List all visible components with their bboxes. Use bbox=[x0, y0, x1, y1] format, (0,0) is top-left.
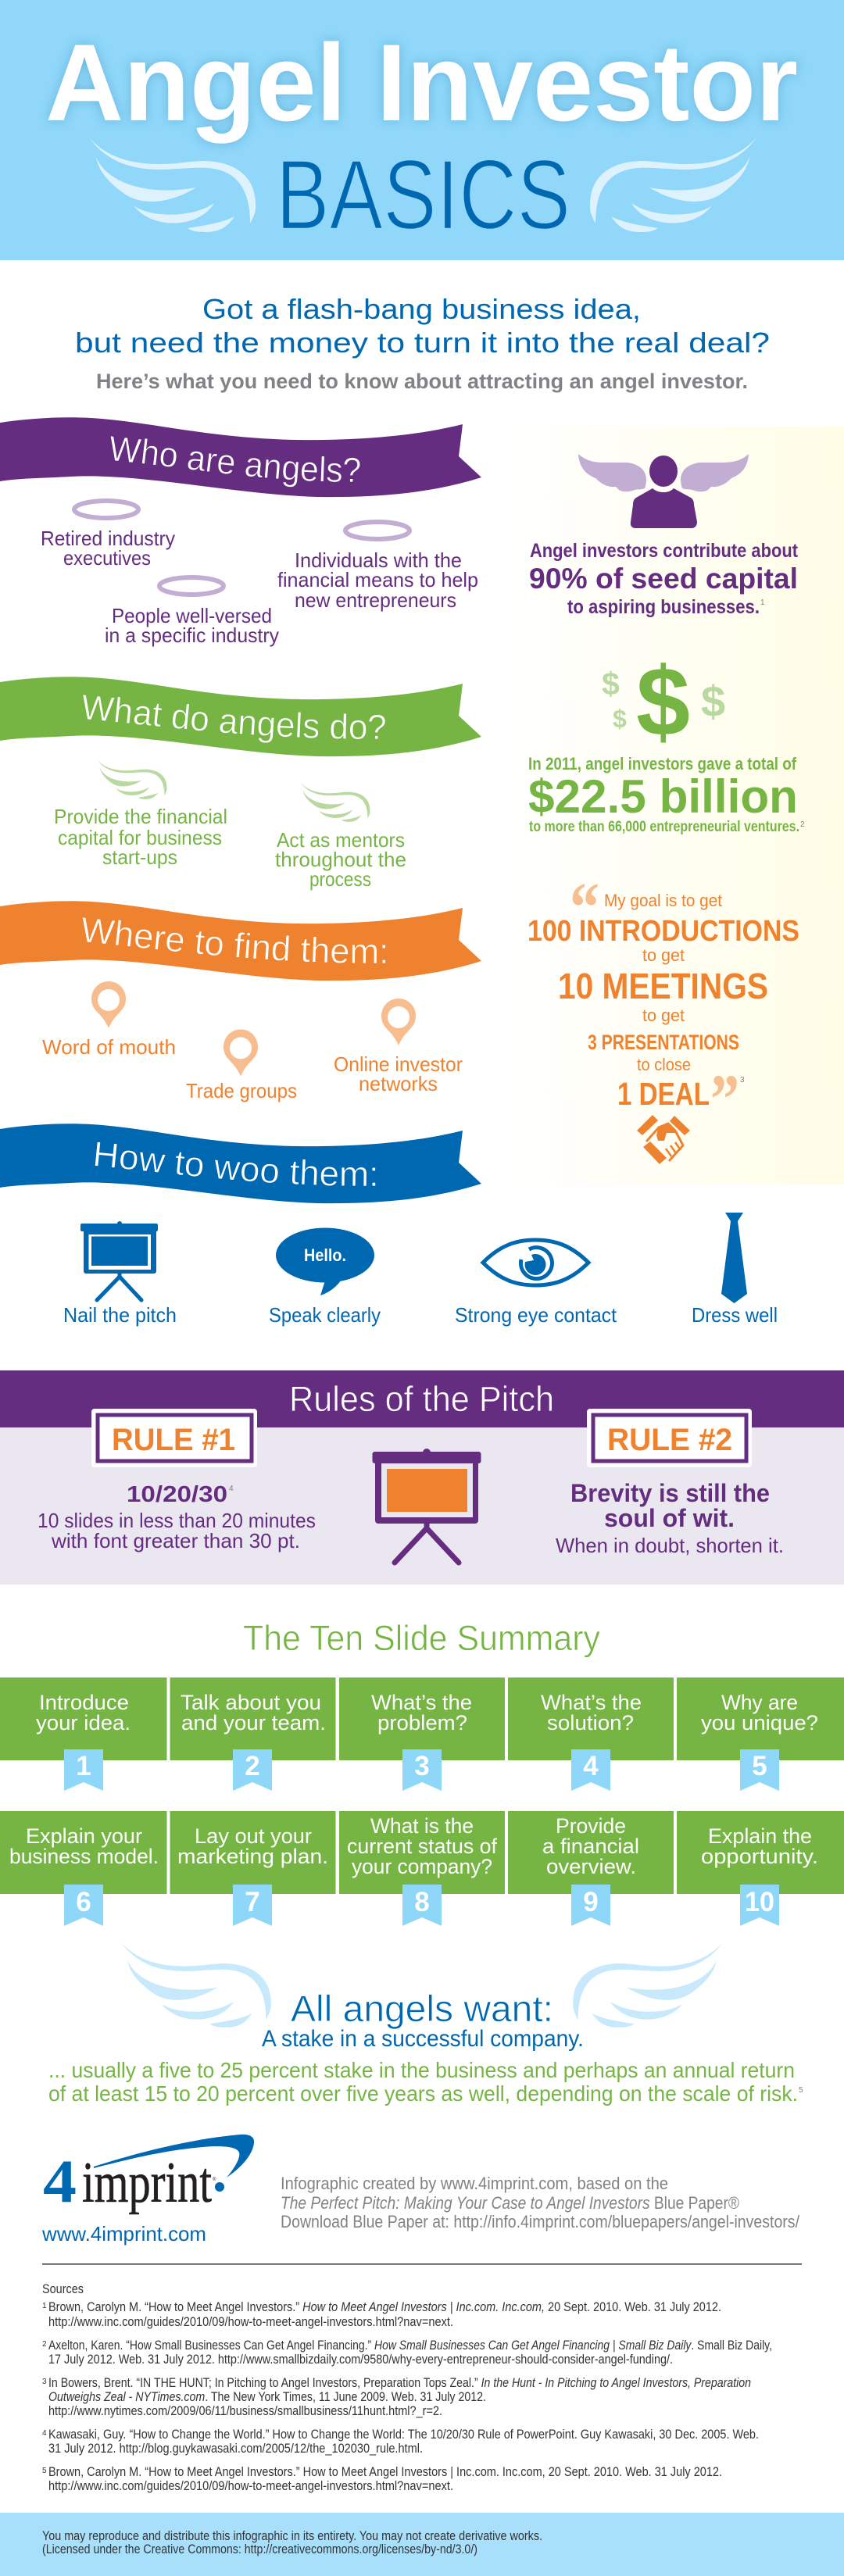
text: sources: Outweighs Zeal - NYTimes.com. The New York Times, 11 June 2009. Web. 31 July 2012. bbox=[48, 2390, 486, 2404]
stat: 22.5 billion: to more than 66,000 entrepreneurial ventures. bbox=[529, 819, 799, 835]
text: sources: In Bowers, Brent. “IN THE HUNT; In Pitching to Angel Investors, Preparation Tops Zeal.” In the Hunt - In Pitching to Angel Investors, Preparation bbox=[48, 2376, 751, 2390]
slide 9: 9 bbox=[583, 1887, 599, 1917]
text: stake details: ... usually a five to 25 percent stake in the business and perhaps an annual return bbox=[48, 2058, 795, 2082]
stat: 22.5 billion: 2 bbox=[800, 820, 805, 829]
slide 10: Explain the bbox=[708, 1824, 812, 1848]
panel: cream stats background bbox=[500, 427, 844, 1184]
slide 2: 2 bbox=[245, 1751, 260, 1781]
icon: pin 1 bbox=[91, 981, 126, 1028]
logo: 4imprint: 4 bbox=[43, 2147, 77, 2215]
logo: 4imprint: ® bbox=[213, 2177, 216, 2182]
text: sources: 4 bbox=[42, 2429, 47, 2438]
header band bbox=[0, 0, 844, 260]
slide 2: Talk about you bbox=[181, 1691, 321, 1714]
slide 4: 4 bbox=[583, 1751, 599, 1781]
stat: 22.5 billion bbox=[528, 754, 805, 835]
slide 4 bbox=[508, 1677, 674, 1791]
text: sources: Kawasaki, Guy. “How to Change the World.” How to Change the World: The 10/20/30 Rule of PowerPoint. Guy Kawasaki, 30 Dec. 2005. Web. bbox=[48, 2428, 759, 2442]
icon: angel figure bbox=[578, 454, 749, 528]
icon: wing 1 bbox=[97, 759, 166, 799]
icon: small easel bbox=[80, 1221, 158, 1300]
heading: who are angels: Who are angels? bbox=[111, 436, 359, 488]
heading: how to woo them: How to woo them: bbox=[95, 1142, 375, 1186]
quote: introductions to deal: to get bbox=[642, 945, 685, 965]
icon: right wing bbox=[573, 1942, 723, 2028]
text: credits: Infographic created by www.4imprint.com, based on the bbox=[281, 2174, 668, 2193]
quote: introductions to deal: to close bbox=[637, 1055, 691, 1074]
text: people well-versed: People well-versed bbox=[112, 604, 272, 627]
text: rule 2 details bbox=[556, 1479, 784, 1557]
text: strong eye contact: Strong eye contact bbox=[455, 1303, 617, 1327]
text: rule 2 details: soul of wit. bbox=[604, 1504, 735, 1532]
intro text block bbox=[75, 293, 770, 393]
title: Angel Investor: Angel Investor bbox=[45, 21, 798, 144]
icon: speech bubble bbox=[276, 1228, 374, 1295]
footer band: (Licensed under the Creative Commons: http://creativecommons.org/licenses/by-nd/3.0/) bbox=[42, 2542, 477, 2556]
slide 10 bbox=[677, 1811, 844, 1926]
stat: 90% of seed capital: 1 bbox=[760, 598, 765, 607]
heading: rules of the pitch: Rules of the Pitch bbox=[289, 1379, 554, 1419]
icon: left wing bbox=[121, 1942, 271, 2028]
text: credits: The Perfect Pitch: Making Your Case to Angel Investors Blue Paper® bbox=[281, 2193, 739, 2213]
text: retired executives bbox=[41, 527, 175, 570]
icon: large easel bbox=[372, 1449, 481, 1563]
text: individuals bbox=[277, 548, 478, 612]
text: sources: http://www.inc.com/guides/2010/09/how-to-meet-angel-investors.html?nav=next. bbox=[48, 2479, 453, 2493]
slide 8: current status of bbox=[347, 1835, 497, 1858]
text: website: www.4imprint.com bbox=[41, 2222, 206, 2246]
quote: introductions to deal: 1 DEAL bbox=[617, 1076, 710, 1112]
logo: 4imprint: imprint bbox=[82, 2151, 212, 2215]
quote: introductions to deal: to get bbox=[642, 1006, 685, 1025]
text: rule 2 details: When in doubt, shorten it. bbox=[556, 1534, 784, 1557]
panel: how to woo them bbox=[0, 1124, 778, 1327]
text: act as mentors: process bbox=[309, 867, 371, 891]
slide 9: Provide bbox=[556, 1814, 626, 1838]
slide 3: 3 bbox=[414, 1751, 430, 1781]
quote: introductions to deal: 3 bbox=[740, 1076, 745, 1084]
slide 8: your company? bbox=[352, 1855, 492, 1878]
ribbon: who are angels bbox=[0, 417, 481, 497]
icon: speech bubble: Hello. bbox=[304, 1245, 346, 1265]
text: dress well: Dress well bbox=[692, 1303, 778, 1327]
text: sources: 31 July 2012. http://blog.guykawasaki.com/2005/12/the_102030_rule.html. bbox=[48, 2442, 423, 2456]
icon: dollar signs bbox=[602, 648, 725, 756]
slide 6 bbox=[0, 1811, 167, 1926]
stat: 90% of seed capital: to aspiring businesses. bbox=[567, 596, 760, 618]
panel: slide summary grid bbox=[0, 1677, 844, 1926]
heading: the ten slide summary: The Ten Slide Summary bbox=[243, 1618, 600, 1658]
text: rule 1 details: 10 slides in less than 20 minutes bbox=[38, 1509, 316, 1532]
quote: introductions to deal bbox=[528, 869, 799, 1138]
quote: introductions to deal: 100 INTRODUCTIONS bbox=[528, 915, 799, 948]
footer band: You may reproduce and distribute this infographic in its entirety. You may not create derivative works. bbox=[42, 2529, 542, 2543]
icon: left wing bbox=[89, 138, 256, 232]
slide 1: Introduce bbox=[39, 1691, 129, 1714]
intro text block: but need the money to turn it into the real deal? bbox=[75, 327, 770, 359]
text: sources: http://www.nytimes.com/2009/06/11/business/smallbusiness/11hunt.html?_r=2. bbox=[48, 2404, 442, 2418]
slide 1 bbox=[0, 1677, 167, 1791]
stat: 22.5 billion: $22.5 billion bbox=[528, 770, 798, 823]
text: online investor networks: Online investor bbox=[334, 1052, 463, 1076]
slide 3 bbox=[339, 1677, 505, 1791]
slide 5 bbox=[677, 1677, 844, 1791]
slide 7: Lay out your bbox=[195, 1824, 312, 1848]
quote: introductions to deal: 3 PRESENTATIONS bbox=[588, 1031, 739, 1054]
text: sources: Sources bbox=[42, 2282, 84, 2296]
text: sources: Brown, Carolyn M. “How to Meet Angel Investors.” How to Meet Angel Investors | Inc.com. Inc.com, 20 Sept. 2010. Web. 31 July 2012. bbox=[48, 2300, 721, 2314]
slide 8: 8 bbox=[414, 1887, 430, 1917]
ribbon: what do angels do bbox=[0, 677, 481, 756]
slide 7: marketing plan. bbox=[177, 1845, 328, 1868]
text: people well-versed: in a specific industry bbox=[105, 623, 279, 647]
icon: dollar signs: $ bbox=[701, 677, 725, 726]
subheading: a stake: A stake in a successful company. bbox=[262, 2026, 584, 2052]
text: retired executives: Retired industry bbox=[41, 527, 175, 550]
icon: dollar signs: $ bbox=[613, 705, 627, 733]
slide 10: 10 bbox=[745, 1887, 774, 1917]
text: retired executives: executives bbox=[63, 546, 151, 570]
text: provide capital bbox=[54, 805, 227, 869]
text: sources: 3 bbox=[42, 2378, 47, 2386]
text: sources: http://www.inc.com/guides/2010/09/how-to-meet-angel-investors.html?nav=next. bbox=[48, 2315, 453, 2329]
slide 7: 7 bbox=[245, 1887, 260, 1917]
slide 2 bbox=[170, 1677, 336, 1791]
slide 3: problem? bbox=[377, 1711, 467, 1735]
slide 1: 1 bbox=[76, 1751, 91, 1781]
slide 4: What’s the bbox=[541, 1691, 642, 1714]
icon: pin 3 bbox=[381, 999, 416, 1045]
slide 9: overview. bbox=[546, 1855, 636, 1878]
text: rule 1 details: 10/20/30 bbox=[127, 1482, 227, 1507]
ribbon: how to woo them bbox=[0, 1124, 481, 1203]
slide 9 bbox=[508, 1811, 674, 1926]
ribbon: where to find them bbox=[0, 901, 481, 981]
text: online investor networks bbox=[334, 1052, 463, 1095]
panel: rules of the pitch bbox=[0, 1370, 844, 1585]
quote: introductions to deal: ” bbox=[710, 1061, 739, 1138]
icon: tie bbox=[721, 1213, 747, 1303]
text: individuals: Individuals with the bbox=[295, 548, 462, 572]
text: rule 2 details: Brevity is still the bbox=[570, 1479, 770, 1507]
text: sources: 5 bbox=[42, 2467, 47, 2475]
icon: handshake bbox=[637, 1115, 690, 1164]
slide 1: your idea. bbox=[36, 1711, 131, 1735]
icon: dollar signs: $ bbox=[602, 666, 620, 702]
text: stake details bbox=[48, 2058, 803, 2106]
panel: who are angels bbox=[0, 417, 481, 647]
icon: halo 1 bbox=[74, 501, 138, 518]
text: trade groups: Trade groups bbox=[186, 1079, 297, 1102]
text: nail the pitch: Nail the pitch bbox=[63, 1303, 177, 1327]
text: word of mouth: Word of mouth bbox=[42, 1035, 176, 1059]
slide 9: a financial bbox=[542, 1835, 639, 1858]
text: rule 1 details: 4 bbox=[229, 1485, 234, 1493]
text: provide capital: capital for business bbox=[58, 826, 222, 849]
quote: introductions to deal: 10 MEETINGS bbox=[558, 966, 768, 1006]
heading: where to find them: Where to find them: bbox=[83, 917, 386, 964]
icon: halo 3 bbox=[159, 577, 224, 595]
panel: all angels want bbox=[48, 1942, 803, 2106]
text: people well-versed bbox=[105, 604, 279, 647]
text: rule 1 details: with font greater than 30 pt. bbox=[51, 1529, 300, 1552]
slide 5: you unique? bbox=[701, 1711, 818, 1735]
text: act as mentors bbox=[275, 828, 406, 891]
text: sources: 2 bbox=[42, 2340, 47, 2349]
slide 10: opportunity. bbox=[701, 1845, 818, 1868]
text: act as mentors: throughout the bbox=[275, 848, 406, 871]
heading: all angels want: All angels want: bbox=[291, 1988, 553, 2029]
text: individuals: financial means to help bbox=[277, 568, 478, 591]
logo: 4imprint bbox=[43, 2135, 254, 2215]
intro text block: Here’s what you need to know about attracting an angel investor. bbox=[96, 370, 748, 393]
text: stake details: 5 bbox=[799, 2086, 803, 2095]
stat: 90% of seed capital bbox=[529, 540, 799, 618]
badge: rule 2 bbox=[587, 1409, 752, 1467]
text: sources: Axelton, Karen. “How Small Businesses Can Get Angel Financing.” How Small Businesses Can Get Angel Financing | Small Biz Daily. Small Biz Daily, bbox=[48, 2338, 772, 2353]
panel: where to find them bbox=[0, 901, 481, 1102]
badge: rule 2: RULE #2 bbox=[607, 1423, 732, 1457]
icon: eye bbox=[483, 1240, 588, 1285]
intro text block: Got a flash-bang business idea, bbox=[202, 293, 641, 325]
quote: introductions to deal: “ bbox=[570, 869, 599, 946]
icon: wing 2 bbox=[300, 782, 370, 822]
slide 6: 6 bbox=[76, 1887, 91, 1917]
stat: 90% of seed capital: 90% of seed capital bbox=[529, 563, 798, 595]
slide 4: solution? bbox=[547, 1711, 634, 1735]
stat: 90% of seed capital: Angel investors contribute about bbox=[530, 540, 799, 562]
icon: dollar signs: $ bbox=[636, 648, 690, 756]
slide 3: What’s the bbox=[371, 1691, 472, 1714]
text: act as mentors: Act as mentors bbox=[277, 828, 405, 852]
text: speak clearly: Speak clearly bbox=[269, 1303, 381, 1327]
text: online investor networks: networks bbox=[359, 1072, 438, 1095]
icon: right wing bbox=[590, 138, 756, 232]
slide 6: business model. bbox=[9, 1845, 159, 1868]
text: sources: 17 July 2012. Web. 31 July 2012. http://www.smallbizdaily.com/9580/why-every-entrepreneur-should-consider-angel-funding/. bbox=[48, 2353, 673, 2367]
slide 7 bbox=[170, 1811, 336, 1926]
quote: introductions to deal: My goal is to get bbox=[604, 891, 722, 910]
badge: rule 1: RULE #1 bbox=[112, 1423, 235, 1457]
slide 8: What is the bbox=[370, 1814, 474, 1838]
footer band bbox=[0, 2513, 844, 2576]
panel: what do angels do bbox=[0, 677, 481, 891]
text: sources bbox=[42, 2282, 772, 2493]
text: sources: 1 bbox=[42, 2302, 47, 2310]
text: individuals: new entrepreneurs bbox=[295, 588, 456, 612]
title: BASICS: BASICS bbox=[276, 139, 570, 250]
text: stake details: of at least 15 to 20 percent over five years as well, depending on the scale of risk. bbox=[48, 2081, 798, 2106]
text: rule 1 details bbox=[38, 1482, 316, 1552]
icon: halo 2 bbox=[345, 522, 409, 539]
text: credits bbox=[281, 2174, 800, 2231]
stat: 22.5 billion: In 2011, angel investors gave a total of bbox=[528, 754, 797, 774]
heading: what do angels do: What do angels do? bbox=[83, 695, 385, 743]
badge: rule 1 bbox=[91, 1409, 257, 1467]
text: sources: Brown, Carolyn M. “How to Meet Angel Investors.” How to Meet Angel Investors | Inc.com. Inc.com, 20 Sept. 2010. Web. 31 July 2012. bbox=[48, 2465, 722, 2479]
icon: pin 2 bbox=[224, 1030, 258, 1077]
slide 5: Why are bbox=[721, 1691, 798, 1714]
slide 6: Explain your bbox=[26, 1824, 142, 1848]
slide 2: and your team. bbox=[181, 1711, 326, 1735]
slide 5: 5 bbox=[752, 1751, 767, 1781]
slide 8 bbox=[339, 1811, 505, 1926]
text: provide capital: start-ups bbox=[102, 845, 177, 869]
text: provide capital: Provide the financial bbox=[54, 805, 227, 828]
